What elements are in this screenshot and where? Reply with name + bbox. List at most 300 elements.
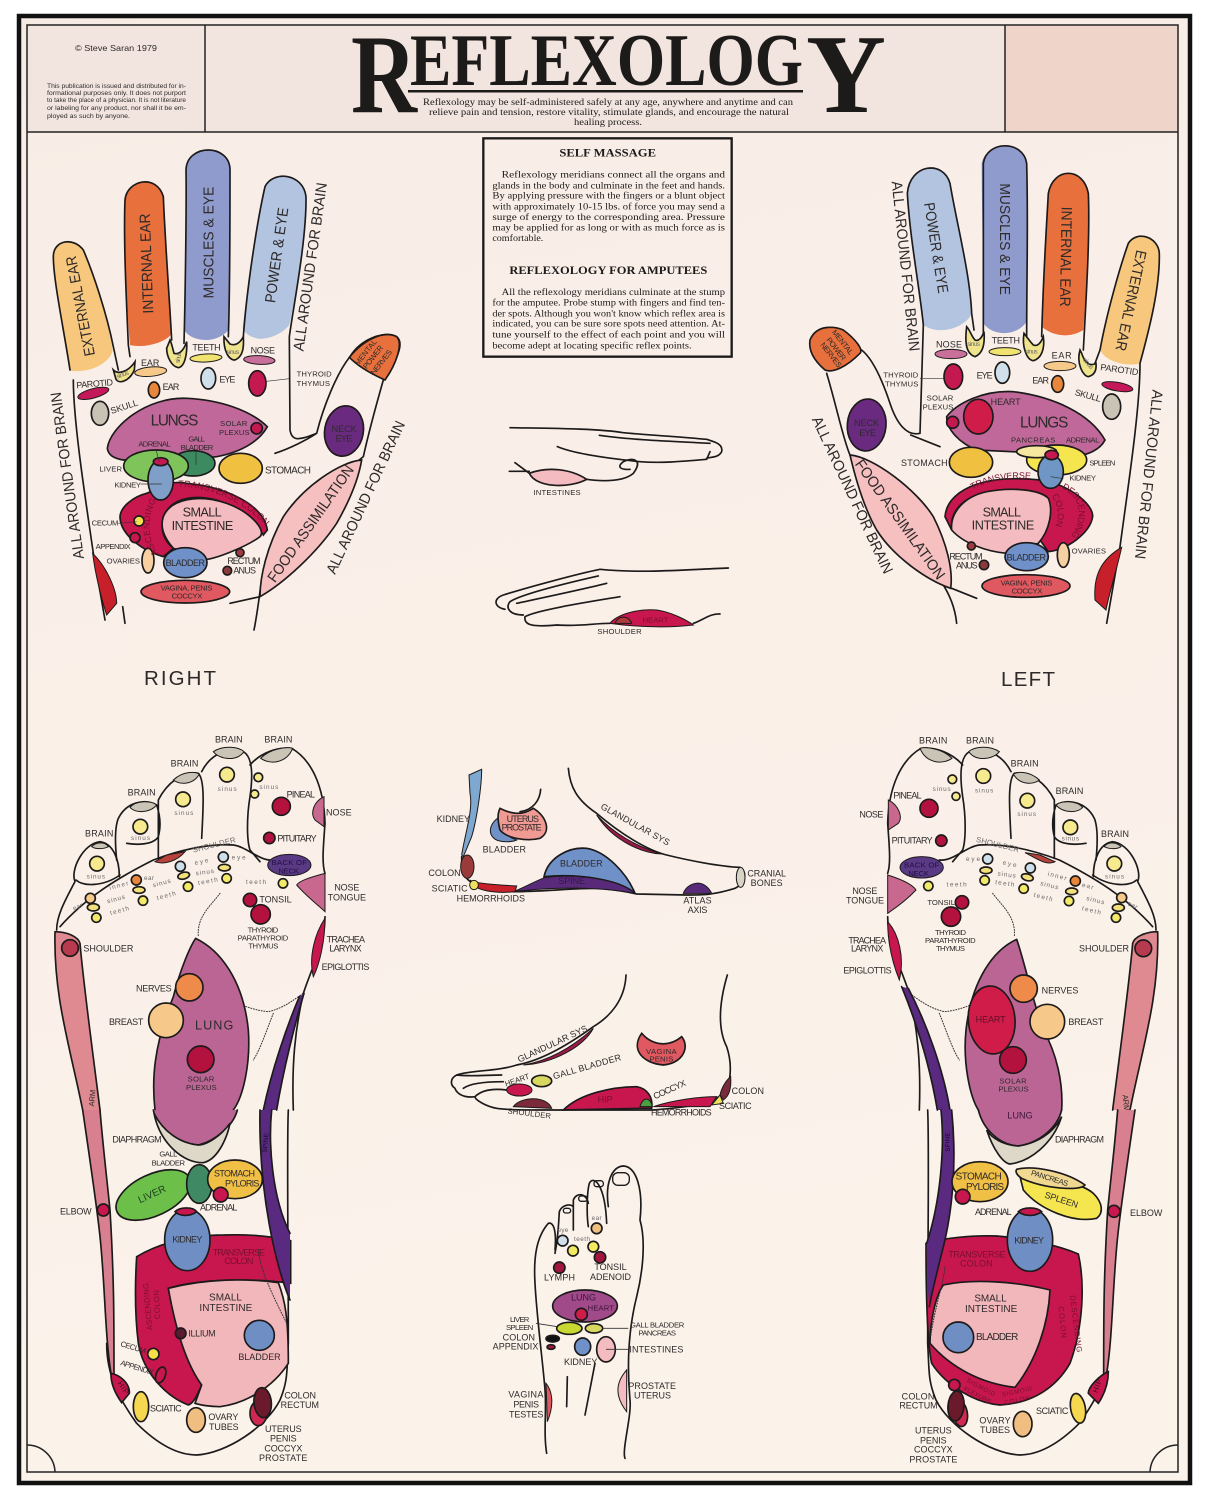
hand labels: NERVES xyxy=(369,348,394,377)
hand labels: PLEXUS xyxy=(219,428,250,437)
foot outline upper xyxy=(55,747,325,1110)
hand labels: NECK xyxy=(854,418,879,428)
foot labels xyxy=(899,1110,1163,1465)
hand labels: INTESTINE xyxy=(972,518,1034,532)
hand outline xyxy=(53,150,400,630)
foot labels: ELBOW xyxy=(60,1206,92,1216)
heading: amputees: REFLEXOLOGY FOR AMPUTEES xyxy=(509,264,707,277)
hand labels: MUSCLES & EYE xyxy=(200,187,217,298)
foot labels: sinus xyxy=(1105,873,1124,880)
hand labels: OVARIES xyxy=(107,556,140,565)
hand labels: STOMACH xyxy=(265,465,311,476)
hand labels: SOLAR xyxy=(220,419,248,428)
zone: colon xyxy=(926,1236,1082,1405)
hand labels: PAROTID xyxy=(76,377,114,390)
foot labels: COLON xyxy=(503,1333,535,1343)
side foot labels: BONES xyxy=(751,878,783,888)
hand labels: THYROID xyxy=(297,370,332,379)
foot labels: HIP xyxy=(1091,1378,1104,1394)
foot labels: TUBES xyxy=(980,1425,1010,1435)
foot labels: sinus xyxy=(174,810,193,817)
zone: lung xyxy=(965,939,1062,1110)
foot labels: VAGINA xyxy=(508,1390,543,1400)
hand labels: LUNGS xyxy=(151,413,198,430)
hand labels: EAR xyxy=(163,382,180,392)
hand labels: PAROTID xyxy=(1100,362,1140,377)
foot labels: UTERUS xyxy=(634,1391,671,1401)
hand labels: ALL AROUND FOR BRAIN xyxy=(323,418,409,577)
reflex organs xyxy=(97,1159,274,1432)
hand labels: TEETH xyxy=(992,335,1020,345)
finger: power and eye xyxy=(243,176,306,339)
foot labels: COLON xyxy=(224,1256,253,1266)
foot labels: LUNG xyxy=(571,1293,596,1303)
foot labels: HIP xyxy=(116,1379,131,1396)
zone: food assimilation xyxy=(850,455,951,588)
foot labels: sinus xyxy=(933,786,951,793)
foot labels: ear xyxy=(72,902,84,912)
title block xyxy=(351,13,886,137)
foot labels: PINEAL xyxy=(893,790,922,800)
self massage body: comfortable. xyxy=(492,233,543,243)
foot labels: SHOULDER xyxy=(1079,944,1129,954)
disclaimer text: formational purposes only. It does not purport xyxy=(47,90,186,97)
outer side foot labels: COCCYX xyxy=(652,1078,687,1101)
foot labels: EPIGLOTTIS xyxy=(843,965,892,975)
foot labels: INTESTINE xyxy=(965,1304,1018,1315)
foot labels: TRANSVERSE xyxy=(213,1247,265,1257)
zone: heart xyxy=(965,984,1018,1056)
outer side foot labels: GALL BLADDER xyxy=(552,1052,623,1081)
foot labels: BRAIN xyxy=(171,759,198,769)
title: R xyxy=(351,13,418,137)
foot labels: sinus xyxy=(259,784,278,791)
self massage body: By applying pressure with the fingers or a blunt object xyxy=(492,191,726,201)
zone: lungs xyxy=(947,392,1105,455)
zone: hip xyxy=(93,553,117,615)
hand labels: DESCENDING xyxy=(1062,483,1085,538)
foot outline lower xyxy=(928,1110,1109,1455)
hand labels: THYMUS xyxy=(297,379,330,388)
side foot labels: UTERUS xyxy=(507,814,539,824)
foot labels: UTERUS xyxy=(915,1425,952,1435)
amputees body xyxy=(492,287,726,350)
foot labels: KIDNEY xyxy=(564,1357,597,1367)
foot labels: ear xyxy=(1126,900,1139,911)
foot labels: TONGUE xyxy=(846,895,884,905)
foot labels: teeth xyxy=(156,890,177,902)
foot labels xyxy=(843,735,1139,1112)
hand labels: SPLEEN xyxy=(1089,458,1115,467)
intro text: Reflexology may be self-administered safely at any age, anywhere and anytime and can xyxy=(423,97,793,108)
title: Y xyxy=(806,13,886,137)
foot labels: BLADDER xyxy=(238,1352,281,1362)
self massage body: with approximately 10-15 lbs. of force you may send a xyxy=(492,201,725,211)
foot labels: DIAPHRAGM xyxy=(1055,1135,1104,1145)
hand labels: ALL AROUND FOR BRAIN xyxy=(290,182,331,352)
foot outline upper xyxy=(888,747,1158,1110)
foot labels: KIDNEY xyxy=(1014,1235,1044,1245)
disclaimer text: to take the place of a physician. It is not literature xyxy=(47,97,186,104)
reflex organs xyxy=(943,1162,1120,1437)
foot labels: HEART xyxy=(976,1015,1006,1025)
foot labels: NECK xyxy=(908,869,930,878)
foot labels: SPLEEN xyxy=(506,1323,533,1332)
panel: left foot upper xyxy=(843,735,1158,1112)
hand labels: EAR xyxy=(141,358,160,368)
foot labels: BRAIN xyxy=(264,735,292,745)
reflex points xyxy=(77,337,275,603)
foot labels: TUBES xyxy=(209,1422,239,1432)
hand labels: LIVER xyxy=(99,464,122,473)
foot labels: BRAIN xyxy=(215,735,243,745)
foot labels: inner xyxy=(1047,871,1067,882)
foot labels: PYLORIS xyxy=(225,1179,259,1189)
foot labels: teeth xyxy=(947,882,967,889)
panel: top of foot diagram xyxy=(493,1166,685,1458)
zone: diaphragm xyxy=(987,1117,1062,1164)
finger: internal ear xyxy=(1042,173,1089,335)
foot labels: BREAST xyxy=(1068,1017,1104,1027)
foot labels: PROSTATE xyxy=(628,1381,676,1391)
hand labels: APPENDIX xyxy=(96,542,131,551)
leader dots xyxy=(258,1250,287,1323)
foot labels: teeth xyxy=(995,879,1015,889)
hand labels: ALL AROUND FOR BRAIN xyxy=(1131,389,1166,560)
title xyxy=(351,13,886,137)
foot labels: INTESTINES xyxy=(629,1344,683,1354)
hand labels: TEETH xyxy=(192,343,221,353)
side foot labels: AXIS xyxy=(688,905,707,915)
zone: small intestine xyxy=(162,499,261,559)
foot labels: eye xyxy=(232,854,246,861)
hand labels: FOOD ASSIMILATION xyxy=(851,456,948,583)
foot labels: sinus xyxy=(106,894,126,905)
foot labels: PINEAL xyxy=(287,789,315,799)
foot labels: teeth xyxy=(197,877,219,887)
foot labels: LARYNX xyxy=(329,944,362,954)
hand labels: STOMACH xyxy=(901,458,948,468)
foot labels: SMALL xyxy=(209,1293,242,1304)
hand labels: NOSE xyxy=(936,339,962,349)
hand labels: MENTAL xyxy=(830,328,855,357)
hand labels: TRANSVERSE COLON xyxy=(178,480,270,526)
foot labels: ARM xyxy=(87,1089,97,1107)
foot labels: ASCENDING xyxy=(141,1283,154,1331)
hand labels: POWER xyxy=(361,343,385,371)
inner side foot diagram xyxy=(428,768,786,915)
reflex points xyxy=(935,327,1134,597)
hand labels: COCCYX xyxy=(1012,586,1042,595)
foot labels: ear xyxy=(592,1215,602,1222)
amputees body: All the reflexology meridians culminate at the stump xyxy=(502,287,726,297)
foot labels: THYROID xyxy=(248,926,279,935)
hand labels: THYROID xyxy=(883,370,919,379)
foot labels: LUNG xyxy=(195,1018,233,1032)
hand labels xyxy=(48,182,409,601)
foot labels: ADRENAL xyxy=(200,1203,237,1213)
outer side foot labels: PENIS xyxy=(649,1055,673,1064)
self massage body: Reflexology meridians connect all the organs and xyxy=(502,170,726,180)
amputees body: der spots. Although you won't know which reflex area is xyxy=(492,308,726,318)
outer side foot labels: COLON xyxy=(732,1086,764,1096)
hand labels: INTERNAL EAR xyxy=(1056,207,1075,307)
intro text: healing process. xyxy=(574,118,642,128)
foot labels: SMALL xyxy=(974,1294,1007,1305)
panel: foot side views xyxy=(428,768,786,1121)
hand labels: KIDNEY xyxy=(1069,474,1096,483)
outer side foot labels: HIP xyxy=(598,1095,613,1105)
foot labels: PLEXUS xyxy=(186,1083,217,1092)
foot labels: BRAIN xyxy=(1056,786,1083,796)
zone: mental power nerves xyxy=(810,327,861,371)
panel: self massage text box xyxy=(483,138,732,357)
hand labels: EXTERNAL EAR xyxy=(63,254,99,357)
side foot labels: COLON xyxy=(428,868,461,878)
foot labels: BRAIN xyxy=(1011,759,1039,769)
foot outline xyxy=(535,1166,643,1458)
hand labels: ALL AROUND FOR BRAIN xyxy=(888,180,922,352)
toe nails xyxy=(563,1173,629,1213)
label: shoulder: SHOULDER xyxy=(597,627,642,636)
foot labels: BRAIN xyxy=(966,735,994,745)
foot labels: PENIS xyxy=(920,1435,947,1445)
foot labels: COLON xyxy=(960,1259,993,1269)
foot labels: ELBOW xyxy=(1130,1208,1163,1218)
hand labels: PLEXUS xyxy=(923,402,953,411)
hand labels: COLON xyxy=(1053,494,1064,527)
hand labels: EYE xyxy=(859,428,876,438)
self massage body: surge of energy to the corresponding area. Pressure xyxy=(492,212,725,222)
foot labels: COLON xyxy=(1004,1395,1031,1407)
foot labels: SIGMOID xyxy=(1001,1385,1033,1399)
hand labels: OVARIES xyxy=(1072,546,1106,555)
foot labels: teeth xyxy=(1033,892,1054,903)
foot labels: PANCREAS xyxy=(1030,1168,1069,1188)
side foot labels: SPINE xyxy=(558,876,585,886)
amputees body: indicated, you can be sure sore spots need attention. At- xyxy=(492,319,725,329)
hand labels: MENTAL xyxy=(353,338,379,367)
zone: small intestine xyxy=(952,489,1051,553)
hand labels: TRANSVERSE xyxy=(970,472,1031,489)
foot labels: INTESTINE xyxy=(199,1303,253,1314)
hand labels: GALL xyxy=(188,435,205,444)
hand labels: NERVES xyxy=(818,341,844,369)
foot labels: OVARY xyxy=(979,1415,1011,1425)
foot labels: PARATHYROID xyxy=(238,934,289,943)
panel: hand side views xyxy=(496,428,728,636)
zone: spine xyxy=(260,1110,290,1300)
finger: external ear xyxy=(1100,236,1159,365)
foot labels: APPENDIX xyxy=(119,1358,155,1377)
copyright line: © Steve Saran 1979 xyxy=(75,43,157,53)
finger: internal ear xyxy=(125,182,171,346)
hand labels: VAGINA, PENIS xyxy=(1001,578,1052,587)
foot labels: NOSE xyxy=(326,808,352,818)
hand labels: BLADDER xyxy=(166,558,205,568)
zone: small intestine xyxy=(168,1280,288,1407)
foot labels: PANCREAS xyxy=(638,1328,676,1337)
spine upper xyxy=(902,987,950,1110)
zone: diaphragm xyxy=(154,1113,230,1163)
zone: vagina penis testes xyxy=(546,1383,552,1422)
leader dots xyxy=(931,1267,945,1337)
panel: left foot lower xyxy=(899,1110,1163,1465)
box border xyxy=(483,138,732,357)
side foot labels: ATLAS xyxy=(683,896,712,906)
label: heart: HEART xyxy=(643,616,669,625)
disclaimer text: This publication is issued and distributed for in- xyxy=(47,83,186,90)
foot labels: STOMACH xyxy=(956,1171,1002,1182)
foot labels: HEART xyxy=(588,1304,614,1313)
zone: lung lower xyxy=(153,1110,237,1145)
finger: muscles and eye xyxy=(184,150,230,340)
hand labels: SKULL xyxy=(1074,387,1102,404)
header band xyxy=(27,25,1178,132)
foot labels: inner xyxy=(109,880,129,892)
foot labels: TRACHEA xyxy=(327,935,365,945)
leader lines xyxy=(118,379,289,523)
hand labels: sinus xyxy=(174,352,183,364)
hand labels: SMALL xyxy=(183,506,222,520)
lower hand side view xyxy=(496,568,728,636)
foot labels: NECK xyxy=(278,867,300,876)
foot outline lower xyxy=(107,1110,288,1455)
zone: lung xyxy=(154,938,249,1110)
hand labels: ALL AROUND FOR BRAIN xyxy=(48,391,88,560)
foot labels: BRAIN xyxy=(919,735,947,745)
hand labels: KIDNEY xyxy=(114,480,141,489)
foot labels: PROSTATE xyxy=(259,1453,307,1463)
foot labels: SOLAR xyxy=(999,1076,1027,1085)
foot labels: SPLEEN xyxy=(1043,1190,1079,1210)
zone: mental power nerves xyxy=(349,335,399,380)
foot labels: ear xyxy=(144,875,154,882)
finger: muscles and eye xyxy=(982,146,1027,333)
foot labels: sinus xyxy=(1062,836,1079,843)
finger: external ear xyxy=(53,242,113,371)
foot labels: teeth xyxy=(574,1236,590,1243)
intro text: relieve pain and tension, restore vitality, stimulate glands, and encourage the natural xyxy=(429,108,789,118)
foot labels: STOMACH xyxy=(214,1169,255,1179)
hand labels: POWER xyxy=(824,336,848,363)
arm band xyxy=(83,1110,114,1373)
hand labels: NECK xyxy=(332,424,357,434)
amputees body: become adept at locating specific reflex points. xyxy=(492,340,692,350)
foot labels: COLON xyxy=(902,1391,934,1401)
zone: prostate uterus xyxy=(618,1370,627,1412)
header pink swatch xyxy=(1005,26,1178,132)
foot labels: SHOULDER xyxy=(192,835,237,855)
side foot labels: BLADDER xyxy=(483,845,526,855)
spine upper xyxy=(263,993,304,1110)
hand labels: NOSE xyxy=(251,345,275,355)
zone: colon xyxy=(136,1235,291,1405)
foot labels: sinus xyxy=(152,878,172,889)
outer side foot labels: GLANDULAR SYS xyxy=(516,1023,589,1064)
self massage body: may be applied for as long or with as much force as is xyxy=(492,223,726,233)
foot labels: PITUITARY xyxy=(892,835,933,845)
hand labels: sinus xyxy=(967,341,980,348)
copyright panel xyxy=(47,43,186,120)
side foot labels: HEMORRHOIDS xyxy=(457,894,525,904)
foot labels: SOLAR xyxy=(188,1075,215,1084)
self massage body xyxy=(492,170,726,243)
foot labels: TONSIL xyxy=(927,898,955,907)
hand labels: THYMUS xyxy=(885,380,918,389)
foot labels: TONSIL xyxy=(594,1262,627,1272)
hand labels: ALL AROUND FOR BRAIN xyxy=(808,414,896,577)
side foot labels xyxy=(428,801,786,915)
foot labels: SHOULDER xyxy=(83,944,134,954)
hand labels: ANUS xyxy=(233,565,256,575)
hand labels xyxy=(808,180,1166,595)
foot labels: teeth xyxy=(109,905,130,917)
hand labels: HEART xyxy=(991,397,1021,407)
foot labels: COLON xyxy=(1056,1306,1069,1338)
disclaimer text: ployed as such by anyone. xyxy=(47,113,130,120)
zone: neck eye xyxy=(321,403,367,459)
arm band xyxy=(1104,1110,1135,1373)
foot labels: NERVES xyxy=(136,984,172,994)
foot labels: TESTES xyxy=(509,1409,543,1419)
hand labels: POWER & EYE xyxy=(920,201,951,294)
foot labels: EPIGLOTTIS xyxy=(322,962,369,972)
disclaimer text: or labeling for any product, nor shall it be em- xyxy=(47,105,186,112)
foot labels: PROSTATE xyxy=(909,1455,957,1465)
hand labels: MUSCLES & EYE xyxy=(996,183,1013,295)
foot labels: DIAPHRAGM xyxy=(112,1135,162,1145)
foot labels: GALL BLADDER xyxy=(630,1320,685,1329)
zone: lungs xyxy=(107,398,267,460)
foot labels: FLEXURE xyxy=(962,1386,992,1406)
zone: nose tongue and trachea xyxy=(888,800,1055,980)
hand labels: CECUM xyxy=(92,519,118,528)
hand labels: PANCREAS xyxy=(1011,436,1055,445)
hand labels: COCCYX xyxy=(172,592,202,601)
side foot labels: GLANDULAR SYS xyxy=(599,801,672,848)
outer side foot labels: HEART xyxy=(504,1072,531,1089)
hand labels: FOOD ASSIMILATION xyxy=(264,462,358,586)
zone: hip xyxy=(1095,547,1122,610)
foot labels: TRACHEA xyxy=(848,935,886,945)
foot labels: ARM xyxy=(1121,1094,1131,1112)
foot labels: LIVER xyxy=(137,1184,168,1206)
foot labels: TONGUE xyxy=(328,893,366,903)
hand labels: EAR xyxy=(1052,350,1072,360)
foot labels: PENIS xyxy=(513,1400,539,1410)
zone: descending colon xyxy=(945,479,1093,552)
side foot labels: SCIATIC xyxy=(432,884,468,894)
upper hand side view xyxy=(509,428,722,497)
outer side foot diagram xyxy=(451,975,764,1121)
leader lines xyxy=(920,379,1063,479)
foot labels: GALL xyxy=(159,1150,177,1159)
foot labels: UTERUS xyxy=(265,1424,302,1434)
hand labels: INTESTINE xyxy=(172,519,233,533)
foot labels xyxy=(72,735,369,1107)
foot labels: SPINE xyxy=(262,1133,270,1153)
outer side foot labels: VAGINA xyxy=(646,1047,678,1056)
foot labels: LARYNX xyxy=(851,944,883,954)
foot labels: TONSIL xyxy=(259,895,292,905)
zone: colon xyxy=(120,482,267,557)
foot labels: PITUITARY xyxy=(277,834,317,844)
label: LEFT: LEFT xyxy=(1001,668,1055,691)
foot labels: PYLORIS xyxy=(966,1182,1004,1193)
hand labels: BLADDER xyxy=(1007,553,1046,563)
foot labels: BLADDER xyxy=(152,1158,185,1167)
